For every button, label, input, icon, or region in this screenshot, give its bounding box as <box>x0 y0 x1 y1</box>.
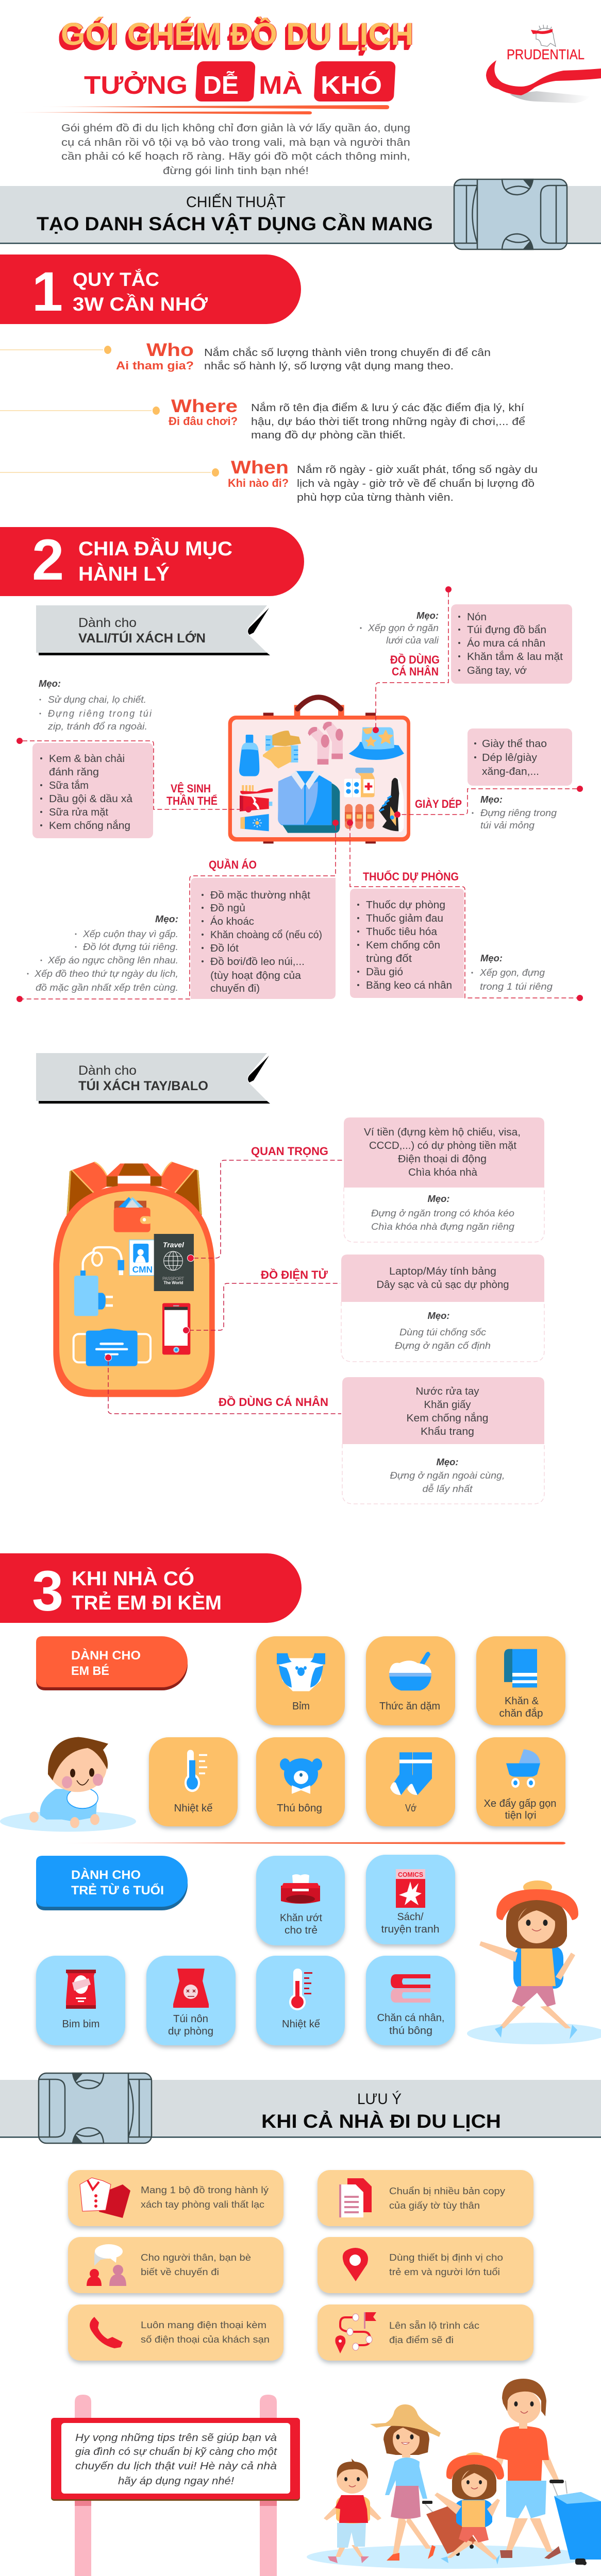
item: passport: The World <box>163 1281 183 1285</box>
callout: toiletries: Mẹo: <box>39 679 61 689</box>
band: notes heading <box>0 2080 601 2138</box>
item: passport: PASSPORT <box>162 1276 185 1281</box>
figure: blue suitcase <box>549 2480 601 2565</box>
callout: toiletries: Đựng riêng trong túi <box>48 708 152 719</box>
rule: who: Who <box>146 340 194 360</box>
section 3 header: TRẺ EM ĐI KÈM <box>72 1591 222 1614</box>
label: for babies <box>36 1636 188 1690</box>
callout: clothes: Xếp đồ theo thứ tự ngày du lịch, <box>34 969 178 979</box>
callout: personal carry items: Đựng ở ngăn ngoài cùng, <box>390 1470 505 1481</box>
callout: clothes <box>16 820 339 1002</box>
callout: toiletries: Sữa rửa mặt <box>49 807 108 818</box>
card: thermometer <box>149 1737 238 1826</box>
callout: important items: Chìa khóa nhà đựng ngăn riêng <box>371 1222 514 1232</box>
callout: personal items: ĐỒ DÙNG <box>390 653 440 666</box>
item: passport <box>154 1234 194 1291</box>
callout: clothes: Đồ mặc thường nhật <box>210 890 310 901</box>
callout: medicine: Mẹo: <box>480 953 503 963</box>
rule: who: Ai tham gia? <box>116 359 194 372</box>
section 1 header <box>0 255 301 324</box>
callout: medicine: Dầu gió <box>366 967 403 978</box>
card: wet tissues: Khăn ướt <box>280 1912 322 1924</box>
callout: personal carry items: dễ lấy nhất <box>423 1484 473 1494</box>
callout: personal items: Túi đựng đồ bẩn <box>467 624 546 636</box>
callout: toiletries <box>16 679 252 838</box>
rule: when: lịch và ngày - giờ trở về để chuẩn bị lượng đồ <box>297 478 535 489</box>
item: phone <box>162 1303 190 1354</box>
callout: toiletries: Kem & bàn chải <box>49 753 125 765</box>
item: toothbrush and paste <box>240 785 273 811</box>
section 1 header: 3W CẦN NHỚ <box>73 293 208 315</box>
section 2 header: HÀNH LÝ <box>78 563 170 585</box>
callout: clothes: chuyến đi) <box>210 983 260 994</box>
rule: when: Nắm rõ ngày - giờ xuất phát, tổng số ngày du <box>297 464 538 476</box>
callout: clothes: Khăn choàng cổ (nếu có) <box>210 929 322 941</box>
intro text: Gói ghém đồ đi du lịch không chỉ đơn giản là vớ lấy quần áo, dụng <box>61 123 410 134</box>
item: face mask <box>74 1329 151 1366</box>
card: thermometer for kids <box>256 1956 345 2045</box>
card: comics: COMICS <box>398 1871 423 1878</box>
callout: personal items: Áo mưa cá nhân <box>467 637 545 649</box>
callout: clothes: (tùy hoạt động của <box>210 970 302 981</box>
card: socks <box>366 1737 455 1826</box>
icon: strap buckle mirrored <box>38 2073 152 2144</box>
callout: electronics <box>182 1255 544 1362</box>
callout: clothes: Đồ lót <box>210 943 239 954</box>
illustration: crawling baby <box>0 1737 136 1832</box>
callout: clothes: Đồ ngủ <box>210 903 245 914</box>
card: teddy bear: Thú bông <box>277 1803 322 1814</box>
card: stroller: tiện lợi <box>505 1810 536 1821</box>
callout: medicine <box>347 820 583 1001</box>
item: sunscreen <box>241 814 269 831</box>
rule: who: nhắc số hành lý, số lượng vật dụng mang theo. <box>204 360 454 372</box>
note: locator device: trẻ em và người lớn tuổi <box>389 2267 500 2277</box>
callout: clothes: Áo khoác <box>210 916 254 927</box>
note: route plan: địa điểm sẽ đi <box>389 2335 454 2345</box>
callout: personal items: Nón <box>467 612 487 623</box>
callout: important items: QUAN TRỌNG <box>251 1145 328 1158</box>
card: diaper <box>256 1636 345 1725</box>
callout: personal carry items: Nước rửa tay <box>415 1386 479 1397</box>
callout: medicine: Thuốc dự phòng <box>366 900 445 911</box>
callout: personal carry items: Khăn giấy <box>424 1399 471 1411</box>
callout: toiletries: Sử dụng chai, lọ chiết. <box>48 694 146 705</box>
callout: personal items: Găng tay, vớ <box>467 665 527 676</box>
rule: when: Khi nào đi? <box>228 477 289 489</box>
intro text <box>61 123 410 177</box>
note: tell relatives: biết về chuyến đi <box>141 2267 219 2277</box>
callout: personal items: CÁ NHÂN <box>392 665 439 678</box>
callout: clothes: Đồ lót đựng túi riêng. <box>83 942 178 952</box>
callout: toiletries: đánh răng <box>49 767 99 778</box>
callout: medicine: Kem chống côn <box>366 940 440 951</box>
closing sign <box>51 2395 300 2576</box>
callout: clothes: đồ mặc gần nhất xếp trên cùng. <box>36 982 178 993</box>
card: sick bag: dự phòng <box>168 2026 213 2037</box>
callout: clothes: Xếp cuộn thay vì gấp. <box>82 929 178 939</box>
card: snacks <box>36 1956 125 2045</box>
card: comics: truyện tranh <box>381 1924 439 1935</box>
callout: electronics: Mẹo: <box>428 1311 449 1321</box>
callout: personal items <box>360 586 572 733</box>
card: teddy bear <box>256 1737 345 1826</box>
title line 2: TƯỞNG <box>84 71 188 99</box>
callout: electronics: Dây sạc và củ sạc dự phòng <box>376 1279 509 1291</box>
rule: when: When <box>231 457 289 478</box>
section 3 header: KHI NHÀ CÓ <box>72 1567 194 1590</box>
item: passport: Travel <box>163 1241 185 1249</box>
note: phone and hotel number: Luôn mang điện thoại kèm <box>141 2320 266 2330</box>
callout: important items: Đựng ở ngăn trong có khóa kéo <box>371 1208 514 1218</box>
label: for babies: EM BÉ <box>71 1664 109 1678</box>
callout: clothes: Mẹo: <box>155 914 178 924</box>
item: medicine <box>344 768 375 797</box>
illustration: girl with backpack <box>467 1880 601 2044</box>
callout: clothes: QUẦN ÁO <box>209 858 257 871</box>
title line 2: DỄ <box>203 72 239 99</box>
section 2 header <box>0 527 304 596</box>
title line 1: GÓI GHÉM ĐỒ DU LỊCH <box>61 16 414 52</box>
card: comics <box>366 1855 455 1944</box>
callout: medicine: THUỐC DỰ PHÒNG <box>363 870 459 883</box>
note: spare outfit <box>68 2170 283 2226</box>
callout: personal items: Mẹo: <box>416 611 439 621</box>
rule: where <box>0 396 525 441</box>
callout: electronics: ĐỒ ĐIỆN TỬ <box>261 1268 328 1281</box>
callout: electronics: Laptop/Máy tính bảng <box>389 1266 496 1277</box>
callout: medicine: Thuốc giảm đau <box>366 913 443 924</box>
logo: Prudential <box>486 25 601 103</box>
card: thermometer: Nhiệt kế <box>174 1803 212 1814</box>
callout: important items <box>188 1117 544 1261</box>
figure: brown suitcase <box>422 2501 477 2556</box>
card: towel and blanket <box>476 1636 565 1725</box>
closing sign: Hy vọng những tips trên sẽ giúp bạn và <box>75 2432 277 2444</box>
figure: son <box>324 2459 381 2563</box>
card: sick bag <box>146 1956 236 2045</box>
rule: who: Nắm chắc số lượng thành viên trong chuyến đi để cân <box>204 347 491 359</box>
item: folded shirt <box>278 771 340 833</box>
card: personal blanket and toy <box>366 1956 455 2045</box>
callout: footwear: Dép lê/giày <box>482 752 537 764</box>
callout: important items: Điện thoại di động <box>398 1154 487 1165</box>
note: document copies <box>318 2170 533 2226</box>
band: tactic heading: CHIẾN THUẬT <box>186 193 286 211</box>
callout: toiletries: zip, tránh đổ ra ngoài. <box>47 721 147 732</box>
card: personal blanket and toy: Chăn cá nhân, <box>377 2012 444 2024</box>
ribbon: backpack <box>36 1053 270 1104</box>
ribbon: suitcase: Dành cho <box>78 616 137 630</box>
note: spare outfit: xách tay phòng vali thất lạc <box>141 2199 264 2210</box>
card: towel and blanket: chăn đắp <box>499 1707 543 1719</box>
ribbon: suitcase: VALI/TÚI XÁCH LỚN <box>78 630 206 646</box>
callout: medicine: Xếp gọn, đựng <box>479 968 545 978</box>
card: wet tissues: cho trẻ <box>285 1925 318 1936</box>
callout: footwear <box>394 728 583 831</box>
intro text: cụ cá nhân rồi vô tội vạ bỏ vào trong vali, mà bạn và người thân <box>61 137 410 148</box>
note: phone and hotel number <box>68 2304 283 2361</box>
card: sick bag: Túi nôn <box>173 2013 208 2025</box>
note: tell relatives: Cho người thân, bạn bè <box>141 2252 251 2263</box>
callout: personal carry items: Mẹo: <box>436 1457 459 1467</box>
callout: important items: CCCD,...) có dự phòng tiền mặt <box>369 1140 516 1151</box>
callout: medicine: Băng keo cá nhân <box>366 980 452 991</box>
callout: personal items: lưới của vali <box>386 635 439 646</box>
note: spare outfit: Mang 1 bộ đồ trong hành lý <box>141 2185 269 2195</box>
callout: personal carry items: Khẩu trang <box>421 1426 474 1437</box>
item: socks <box>308 721 343 765</box>
callout: important items: Mẹo: <box>428 1194 449 1204</box>
callout: clothes: Đồ bơi/đồ leo núi,... <box>210 956 305 968</box>
closing sign: hãy áp dụng ngay nhé! <box>118 2476 234 2487</box>
callout: toiletries: THÂN THỂ <box>166 794 218 807</box>
logo: Prudential: PRUDENTIAL <box>507 46 585 62</box>
closing sign: gia đình có sự chuẩn bị kỹ càng cho một <box>75 2446 278 2458</box>
band: tactic heading: TẠO DANH SÁCH VẬT DỤNG CẦN MANG <box>37 213 433 234</box>
band: notes heading: LƯU Ý <box>357 2091 402 2108</box>
callout: electronics: Đựng ở ngăn cố định <box>395 1341 491 1351</box>
card: baby food <box>366 1636 455 1725</box>
callout: footwear: Giày thể thao <box>482 738 547 750</box>
callout: important items: Ví tiền (đựng kèm hộ chiếu, visa, <box>364 1127 521 1138</box>
callout: personal carry items: Kem chống nắng <box>406 1412 489 1424</box>
note: document copies: của giấy tờ tùy thân <box>389 2200 480 2211</box>
title line 2 <box>84 61 396 101</box>
rule: where: Nắm rõ tên địa điểm & lưu ý các đặc điểm địa lý, khí <box>251 402 524 414</box>
card: towel and blanket: Khăn & <box>505 1696 539 1707</box>
card: personal blanket and toy: thú bông <box>389 2025 432 2037</box>
callout: personal items: Khăn tắm & lau mặt <box>467 651 563 663</box>
item: ID card: CMN <box>132 1264 153 1275</box>
title underline strokes <box>11 105 389 114</box>
callout: electronics: Dùng túi chống sốc <box>399 1327 486 1337</box>
divider stroke <box>50 1842 565 1844</box>
ribbon: backpack: TÚI XÁCH TAY/BALO <box>78 1078 208 1093</box>
callout: personal carry items: ĐỒ DÙNG CÁ NHÂN <box>219 1396 328 1409</box>
section 3 header <box>0 1553 302 1623</box>
card: stroller <box>476 1737 565 1826</box>
figure: daughter <box>435 2452 504 2565</box>
note: locator device: Dùng thiết bị định vị cho <box>389 2252 503 2263</box>
callout: personal items: Xếp gọn ở ngăn <box>368 623 439 633</box>
rule: where: hậu, dự báo thời tiết trong những ngày đi chơi,... để <box>251 416 525 428</box>
callout: footwear: Mẹo: <box>480 794 503 805</box>
figure: mother <box>370 2404 441 2561</box>
card: comics: Sách/ <box>397 1911 424 1923</box>
item: power bank with cable <box>74 1247 124 1316</box>
item: wallet <box>114 1197 152 1232</box>
rule: where: Where <box>171 396 238 416</box>
label: for children from 6 <box>36 1856 188 1910</box>
closing sign: chuyến du lịch thật vui! Hè này cả nhà <box>75 2461 277 2472</box>
callout: footwear: Đựng riêng trong <box>480 808 557 818</box>
illustration: family travelling <box>307 2379 601 2569</box>
intro text: cần phải có kế hoạch rõ ràng. Hãy gói đồ một cách thông minh, <box>61 151 410 162</box>
label: for children from 6: DÀNH CHO <box>71 1868 141 1882</box>
callout: personal carry items <box>105 1354 544 1504</box>
callout: toiletries: VỆ SINH <box>171 782 211 795</box>
callout: footwear: GIÀY DÉP <box>415 798 462 810</box>
item: sneaker <box>379 777 404 832</box>
card: stroller: Xe đẩy gấp gọn <box>483 1798 557 1809</box>
section 1 header: 1 <box>32 260 63 323</box>
rule: when <box>0 457 538 503</box>
intro text: đừng gói linh tinh bạn nhé! <box>163 165 309 177</box>
note: document copies: Chuẩn bị nhiều bản copy <box>389 2186 505 2196</box>
callout: toiletries: Kem chống nắng <box>49 820 130 832</box>
band: tactic heading <box>0 186 601 244</box>
item: ID card <box>129 1240 155 1276</box>
note: tell relatives <box>68 2237 283 2293</box>
label: for babies: DÀNH CHO <box>71 1648 141 1663</box>
title line 2: MÀ <box>259 72 303 99</box>
card: diaper: Bỉm <box>292 1701 310 1712</box>
callout: important items: Chìa khóa nhà <box>408 1167 478 1178</box>
callout: medicine: trùng đốt <box>366 953 412 964</box>
label: for children from 6: TRẺ TỪ 6 TUỔI <box>71 1883 164 1897</box>
rule: where: mang đồ dự phòng cần thiết. <box>251 430 406 441</box>
section 1 header: QUY TẮC <box>73 268 159 290</box>
figure: father <box>495 2379 561 2559</box>
ribbon: backpack: Dành cho <box>78 1063 137 1078</box>
illustration: open suitcase <box>228 697 410 843</box>
rule: who <box>0 340 491 372</box>
illustration: backpack <box>53 1162 215 1397</box>
section 2 header: 2 <box>32 528 64 592</box>
note: route plan <box>318 2304 533 2361</box>
rule: where: Đi đâu chơi? <box>169 415 238 428</box>
item: sun hat <box>349 727 404 760</box>
card: wet tissues <box>256 1856 345 1945</box>
card: socks: Vớ <box>405 1803 416 1814</box>
item: bottle <box>239 735 259 776</box>
note: phone and hotel number: số điện thoại của khách sạn <box>141 2334 270 2345</box>
section 2 header: CHIA ĐẦU MỤC <box>78 537 232 560</box>
callout: clothes: Xếp áo ngực chồng lên nhau. <box>47 955 178 965</box>
band: notes heading: KHI CẢ NHÀ ĐI DU LỊCH <box>261 2111 501 2132</box>
card: snacks: Bim bim <box>62 2019 100 2030</box>
callout: medicine: Thuốc tiêu hóa <box>366 926 438 938</box>
icon: strap buckle <box>454 179 567 250</box>
title line 2: KHÓ <box>321 71 382 99</box>
callout: medicine: trong 1 túi riêng <box>480 981 553 992</box>
card: baby food: Thức ăn dặm <box>379 1701 440 1712</box>
callout: toiletries: Dầu gội & dầu xả <box>49 793 133 805</box>
ribbon: suitcase <box>36 605 270 655</box>
item: gloves and towel <box>263 731 301 769</box>
callout: footwear: xăng-đan,... <box>482 766 539 777</box>
callout: footwear: túi vải mỏng <box>480 820 535 831</box>
card: thermometer for kids: Nhiệt kế <box>282 2019 320 2030</box>
note: route plan: Lên sẵn lộ trình các <box>389 2320 479 2331</box>
section 3 header: 3 <box>32 1560 63 1623</box>
rule: when: phù hợp của từng thành viên. <box>297 492 454 503</box>
callout: toiletries: Sữa tắm <box>49 779 89 791</box>
item: bandages <box>345 804 374 829</box>
note: locator device <box>318 2237 533 2293</box>
